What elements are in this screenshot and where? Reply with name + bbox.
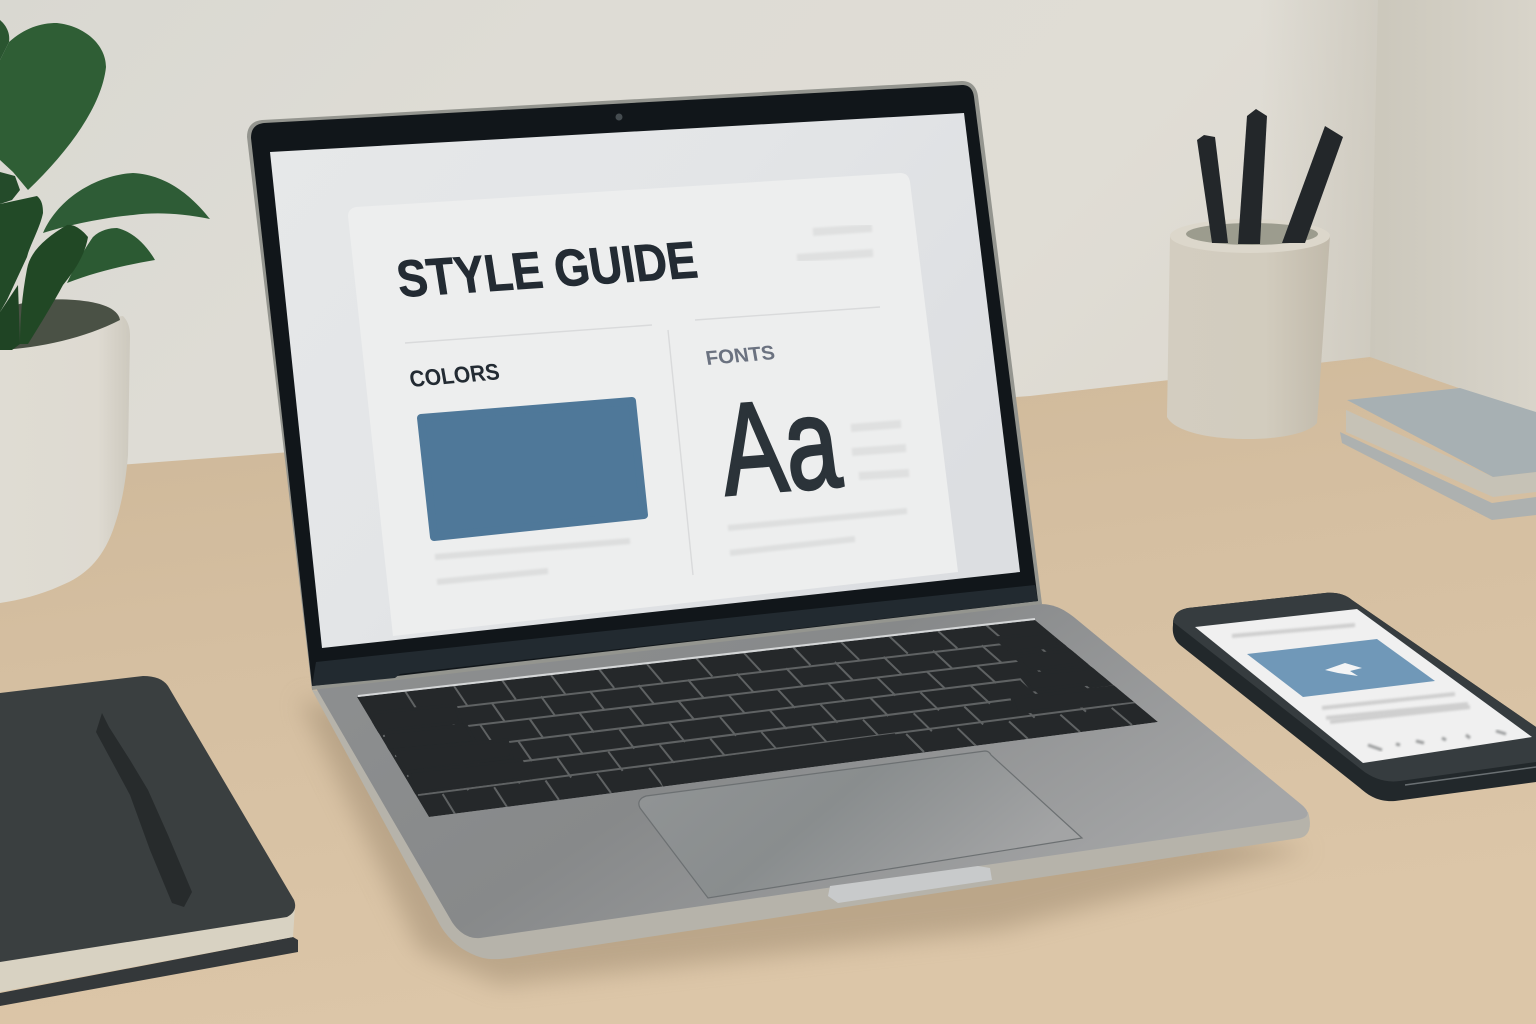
phone banner arrow (1325, 663, 1362, 676)
wide keys (372, 633, 1137, 793)
plant leaves (0, 20, 210, 350)
desk (0, 357, 1536, 1024)
hinge band (312, 585, 1038, 686)
laptop lid (247, 81, 1042, 690)
corner shade (1260, 0, 1380, 400)
phone nav icons (1368, 731, 1506, 750)
colour placeholder lines (435, 541, 630, 582)
right wall (1370, 0, 1536, 415)
notebook (0, 676, 298, 1006)
webcam (616, 114, 622, 120)
phone text lines (1232, 625, 1470, 722)
keyboard top highlight (358, 619, 1035, 696)
pens (1197, 109, 1343, 244)
colour swatch (421, 401, 644, 537)
screen bezel (251, 85, 1038, 686)
phone banner (1247, 639, 1435, 697)
laptop front lip (312, 690, 1310, 959)
font placeholder lines (851, 424, 909, 476)
stacked books (1340, 388, 1536, 520)
phone edge highlight (1405, 767, 1536, 785)
dividers (405, 307, 880, 575)
fonts heading: FONTS (704, 342, 777, 370)
wall (0, 0, 1536, 480)
plant pot (0, 299, 130, 603)
font caption lines (728, 511, 907, 553)
font specimen: Aa (711, 369, 848, 523)
front notch (828, 866, 992, 903)
style guide page (348, 173, 958, 636)
trackpad (639, 751, 1082, 898)
header placeholder lines (797, 228, 873, 258)
keyboard (357, 620, 1158, 817)
colors heading: COLORS (407, 358, 502, 392)
laptop shadow (300, 700, 1310, 985)
title: STYLE GUIDE (393, 232, 701, 309)
pen on notebook (96, 713, 192, 907)
phone (1173, 593, 1536, 801)
pen cup (1167, 109, 1343, 439)
screen (270, 113, 1020, 648)
laptop base (316, 604, 1308, 938)
phone screen (1195, 609, 1532, 763)
laptop (247, 81, 1310, 959)
phone top face (1173, 593, 1536, 781)
